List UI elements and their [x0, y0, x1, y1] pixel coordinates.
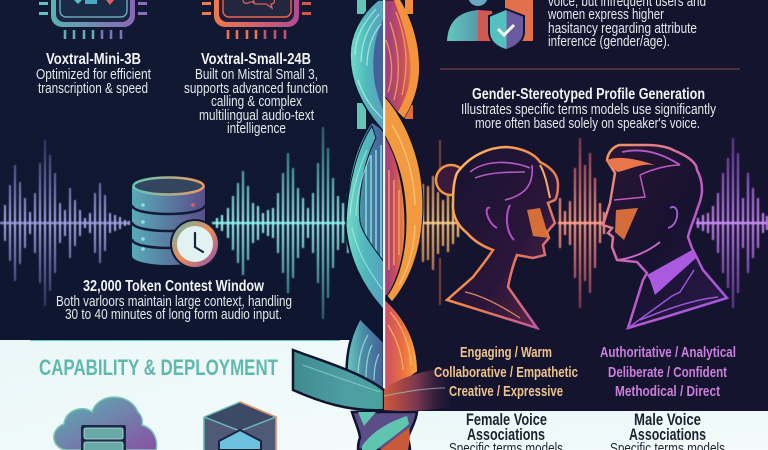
- text block: context window: [56, 278, 292, 323]
- text block: gender-stereotyped profile generation: Illustrates specific terms models use significantly: [461, 102, 717, 118]
- waveform: orange: [420, 140, 460, 305]
- ribbon knot left: [293, 350, 384, 410]
- female voice terms: Engaging / Warm: [460, 344, 552, 361]
- heading: capability and deployment: CAPABILITY & DEPLOYMENT: [39, 355, 278, 380]
- male voice terms: [600, 344, 736, 400]
- text block: gender-stereotyped profile generation: [461, 86, 717, 132]
- text block: Voxtral-Small-24B: multilingual audio-text: [199, 108, 314, 124]
- text block: Voxtral-Small-24B: Built on Mistral Small 3,: [195, 67, 318, 83]
- text block: Voxtral-Small-24B: supports advanced function: [184, 81, 328, 97]
- text block: Voxtral-Small-24B: intelligence: [227, 121, 286, 137]
- male voice associations: Male Voice: [634, 411, 701, 429]
- chip icon: Voxtral-Small-24B: [202, 0, 311, 39]
- dark background left: [0, 0, 384, 340]
- text block: user hesitancy: hasitancy regarding attribute: [548, 21, 697, 37]
- text block: Voxtral-Mini-3B: Optimized for efficient: [36, 67, 151, 83]
- male voice associations: [610, 411, 725, 450]
- text block: context window: 30 to 40 minutes of long form audio input.: [65, 307, 282, 323]
- icon: database with clock: [132, 178, 220, 269]
- waveform: coral: [558, 138, 606, 308]
- male voice terms: Deliberate / Confident: [608, 364, 727, 381]
- text block: user hesitancy: inference (gender/age).: [548, 34, 670, 50]
- female voice terms: Creative / Expressive: [449, 383, 563, 400]
- female voice associations: [449, 411, 563, 450]
- text block: Voxtral-Small-24B: [184, 51, 328, 137]
- text block: user hesitancy: women express higher: [547, 7, 664, 23]
- text block: Voxtral-Mini-3B: transcription & speed: [38, 81, 148, 97]
- text block: gender-stereotyped profile generation: Gender-Stereotyped Profile Generation: [472, 86, 705, 103]
- braid: lower twist: [352, 412, 417, 450]
- dark background right: [384, 0, 768, 411]
- silhouette: man profile: [603, 145, 727, 328]
- center divider line: [383, 0, 385, 390]
- female voice terms: [434, 344, 578, 400]
- light background panel left: [0, 340, 384, 450]
- waveform: purple: [0, 140, 130, 306]
- female voice associations: Associations: [467, 426, 545, 444]
- text block: Voxtral-Small-24B: Voxtral-Small-24B: [201, 51, 311, 68]
- text block: Voxtral-Mini-3B: Voxtral-Mini-3B: [46, 51, 141, 68]
- braid: teal strands: [346, 0, 384, 395]
- icon: person with shield: [447, 0, 533, 50]
- text block: Voxtral-Small-24B: calling & complex: [211, 94, 303, 110]
- text block: gender-stereotyped profile generation: more often based solely on speaker's voice.: [475, 116, 700, 132]
- female voice terms: Collaborative / Empathetic: [434, 364, 578, 381]
- waveform: violet: [696, 138, 768, 308]
- male voice terms: Methodical / Direct: [615, 383, 720, 400]
- female voice associations: Female Voice: [466, 411, 547, 429]
- text block: Voxtral-Mini-3B: [36, 51, 151, 97]
- text block: context window: Both varloors maintain large context, handling: [56, 294, 292, 310]
- braid: orange strands: [384, 0, 423, 395]
- male voice associations: Associations: [629, 426, 706, 444]
- text block: context window: 32,000 Token Contest Window: [83, 278, 265, 295]
- text block: user hesitancy: [547, 0, 706, 50]
- braid: vertical pale bars: [357, 0, 413, 129]
- icon: cloud server: [54, 397, 157, 450]
- icon: cube deployment: [204, 402, 276, 450]
- silhouette: woman profile: [436, 147, 558, 328]
- ribbon knot right: [384, 367, 450, 411]
- light background panel right: [384, 411, 768, 450]
- chip icon: Voxtral-Mini-3B: [39, 0, 147, 39]
- waveform: teal: [212, 127, 350, 319]
